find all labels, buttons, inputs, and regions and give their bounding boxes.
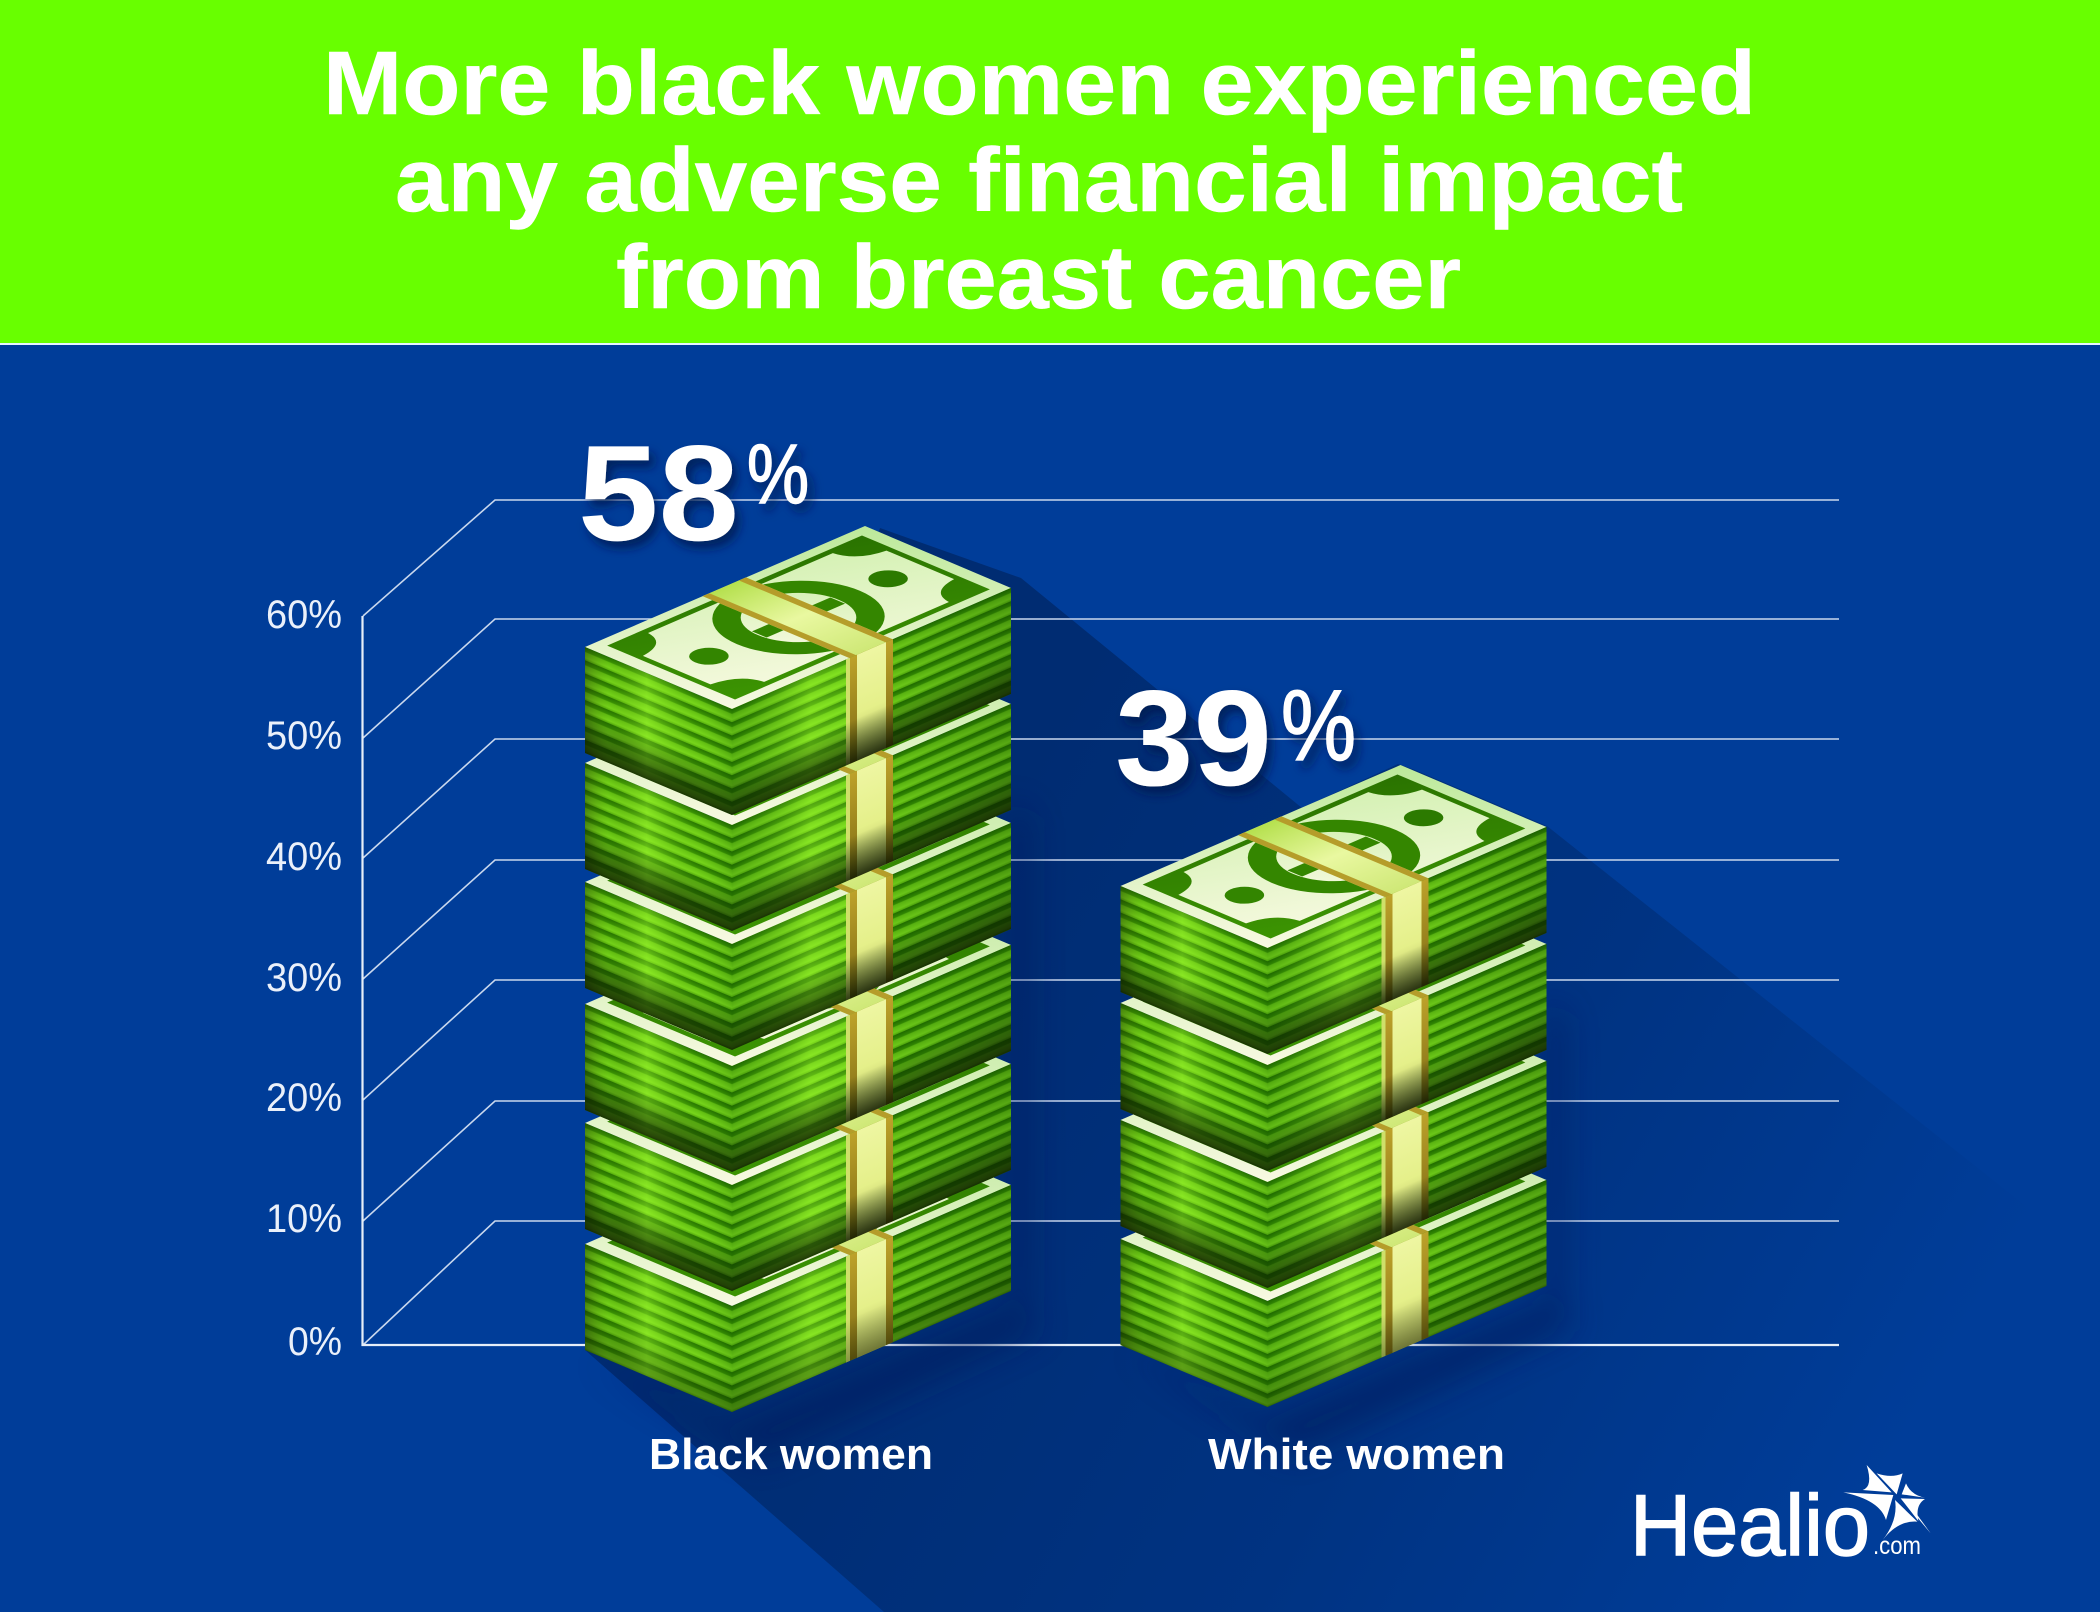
y-axis labels: 20%	[266, 1076, 342, 1120]
value: 58%: %	[747, 427, 809, 521]
header band	[0, 0, 2100, 343]
value: 39%: %	[1281, 670, 1356, 782]
money stack: black women	[585, 526, 1011, 1412]
value: 58%: 58	[578, 417, 739, 569]
money stack: white women	[1120, 765, 1546, 1407]
value: 39%: 39	[1115, 662, 1272, 814]
title	[323, 34, 1756, 328]
y-axis labels: 40%	[266, 835, 342, 879]
value: 39%	[1115, 662, 1356, 814]
title: any adverse financial impact	[395, 131, 1683, 231]
category label: black women: Black women	[649, 1430, 933, 1479]
soft shadow under stacks	[590, 800, 1575, 1460]
y-axis labels: 30%	[266, 956, 342, 1000]
y-axis labels: 50%	[266, 714, 342, 758]
logo: Healio.com: Healio	[1630, 1478, 1870, 1574]
y-axis labels: 60%	[266, 593, 342, 637]
long cast shadow	[585, 528, 2100, 1612]
y-axis labels: 0%	[288, 1320, 342, 1364]
y-axis labels: 10%	[266, 1197, 342, 1241]
chart grid and axis	[362, 500, 1839, 1345]
y-axis labels	[266, 593, 342, 1364]
category label: white women: White women	[1208, 1430, 1505, 1479]
title: from breast cancer	[616, 228, 1461, 328]
logo: Healio.com: .com	[1873, 1532, 1921, 1560]
title: More black women experienced	[323, 34, 1756, 134]
value: 58%	[578, 417, 809, 569]
